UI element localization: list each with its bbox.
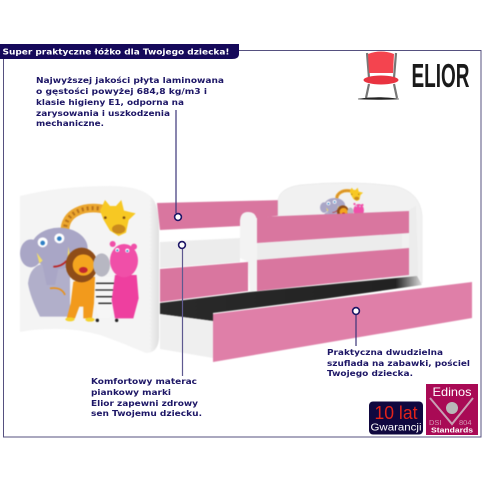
animal print [20,200,139,322]
text block: drawer [327,347,470,378]
badge: 10 years warranty: Gwarancji [370,422,422,434]
text block: drawer: Praktyczna dwudzielna [327,347,443,357]
text block: drawer: szuflada na zabawki, pościel [327,358,470,368]
frame [4,50,481,437]
title banner: Super praktyczne łóżko dla Twojego dziecka! [2,46,230,56]
bed illustration [20,183,472,362]
drawer [213,282,472,362]
badge: Edinos standards: 804 [459,418,472,427]
badge: 10 years warranty [369,402,423,434]
text block: board quality: o gęstości powyżej 684,8 kg/m3 i [36,86,207,96]
logo: Elior chair [358,52,470,100]
black underside [160,276,422,321]
icon: red chair [358,52,399,100]
small animal print [320,188,364,233]
text block: mattress: piankowy marki [91,387,171,397]
left headboard [20,186,159,353]
badge: 10 years warranty: 10 lat [374,403,418,423]
text block: board quality [36,75,224,128]
badge: Edinos standards: Edinos [432,385,472,399]
white base under drawer [160,314,213,358]
pointer: drawer [353,308,359,346]
text block: board quality: zarysowania i uszkodzenia [36,108,170,118]
text block: mattress: Elior zapewni zdrowy [91,398,199,408]
title banner [0,44,239,59]
text block: drawer: Twojego dziecka. [327,368,413,378]
side panel pink [160,262,248,302]
text block: mattress: Komfortowy materac [91,376,197,386]
mattress [160,234,402,268]
back rail [157,200,284,230]
text block: mattress [91,376,202,418]
text block: mattress: sen Twojemu dziecku. [91,408,202,418]
badge: Edinos standards: Standards [431,426,473,434]
guard post [240,212,257,292]
right headboard [278,183,422,283]
front guard rail [257,211,409,243]
text block: board quality: Najwyższej jakości płyta laminowana [36,75,224,85]
badge: Edinos standards [426,384,478,435]
text block: board quality: mechaniczne. [36,118,104,128]
pointer: board [175,110,181,220]
text block: board quality: klasie higieny E1, odporna na [36,97,184,107]
pointer: mattress [179,242,185,376]
badge: Edinos standards: DSI [429,418,442,427]
right post [409,206,418,276]
